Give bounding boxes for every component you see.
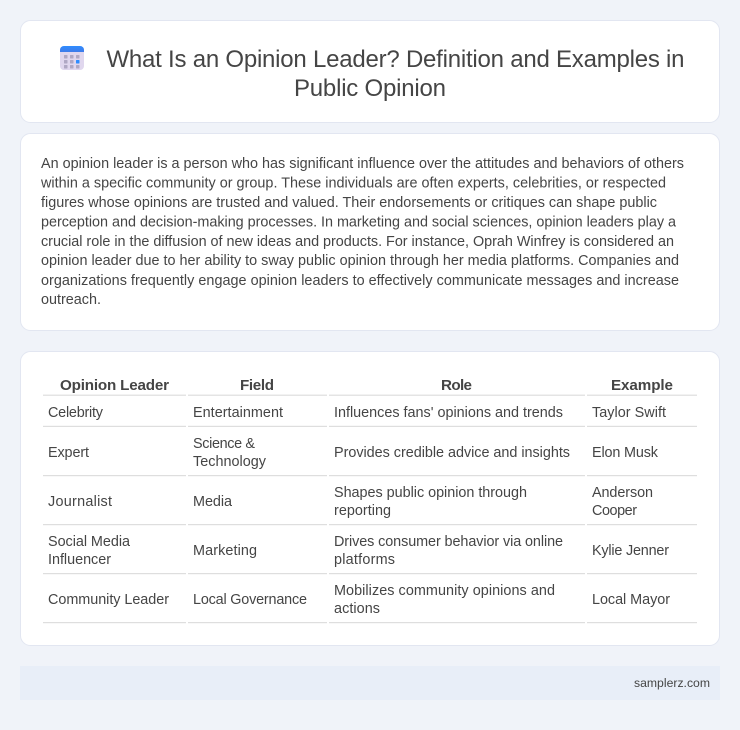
title <box>106 46 684 102</box>
footer: samplerz.com <box>634 676 710 690</box>
table row: social media influencer: Influencer <box>48 552 111 568</box>
table row: celebrity: Entertainment <box>193 405 283 421</box>
table row: community leader: actions <box>334 601 380 617</box>
text block: definition paragraph: outreach. <box>41 292 101 308</box>
table row: journalist: reporting <box>334 503 391 519</box>
text block: definition paragraph: within a specific community or group. These individuals are often experts, celebrities, or respected <box>40 176 666 192</box>
title: What Is an Opinion Leader? Definition and Examples in <box>106 46 684 73</box>
footer <box>20 666 720 700</box>
table row: social media influencer: Drives consumer behavior via online <box>334 534 563 550</box>
table row: celebrity: Taylor Swift <box>592 405 666 421</box>
text block: definition paragraph: figures whose opinions are trusted and valued. Their endorsements or critiques can shape public <box>41 195 657 211</box>
table header: Role <box>441 377 472 394</box>
table row: social media influencer: Social Media <box>48 534 130 550</box>
table row: community leader: Mobilizes community opinions and <box>334 583 555 599</box>
table header: Example <box>611 377 673 394</box>
text block: definition paragraph: opinion leader due to her ability to sway public opinion through her media platforms. Companies and <box>41 253 679 269</box>
panel: definition <box>20 134 720 330</box>
table row: community leader: Community Leader <box>48 592 169 608</box>
table row: social media influencer: platforms <box>334 552 395 568</box>
table row: community leader: Local Governance <box>193 592 307 608</box>
table row: expert <box>48 436 659 470</box>
table row: celebrity: Celebrity <box>48 405 104 421</box>
table row: expert: Technology <box>193 454 267 470</box>
table row: journalist: Media <box>193 494 232 510</box>
table header: Opinion Leader <box>60 377 169 394</box>
table header <box>60 377 673 394</box>
table row: community leader: Local Mayor <box>592 592 670 608</box>
table row: community leader <box>48 583 670 617</box>
title: Public Opinion <box>294 75 446 102</box>
table row: expert: Expert <box>48 445 89 461</box>
table row: journalist: Journalist <box>48 494 112 510</box>
table header: Field <box>240 377 274 394</box>
text block: definition paragraph: perception and decision-making processes. In marketing and social sciences, opinion leaders play a <box>41 214 676 230</box>
text block: definition paragraph: crucial role in the diffusion of new ideas and products. For instance, Oprah Winfrey is considered an <box>41 234 674 250</box>
text block: definition paragraph <box>40 156 684 308</box>
text block: definition paragraph: An opinion leader is a person who has significant influence over the attitudes and behaviors of others <box>41 156 684 172</box>
table row: expert: Science & <box>193 436 255 452</box>
panel: table card <box>20 352 720 646</box>
table row: celebrity <box>48 405 666 421</box>
table row: celebrity: Influences fans' opinions and trends <box>334 405 563 421</box>
table row: journalist: Shapes public opinion through <box>334 485 527 501</box>
table row: expert: Elon Musk <box>592 445 659 461</box>
table row: social media influencer <box>48 534 669 568</box>
table row: social media influencer: Marketing <box>193 543 257 559</box>
table row: journalist: Cooper <box>592 503 637 519</box>
table row: expert: Provides credible advice and insights <box>334 445 570 461</box>
text block: definition paragraph: organizations frequently engage opinion leaders to effectively communicate messages and increase <box>41 273 679 289</box>
table row: journalist <box>48 485 653 519</box>
table row: journalist: Anderson <box>592 485 653 501</box>
panel: title card <box>20 20 720 122</box>
table row: social media influencer: Kylie Jenner <box>592 543 669 559</box>
icon: calendar <box>60 46 84 70</box>
